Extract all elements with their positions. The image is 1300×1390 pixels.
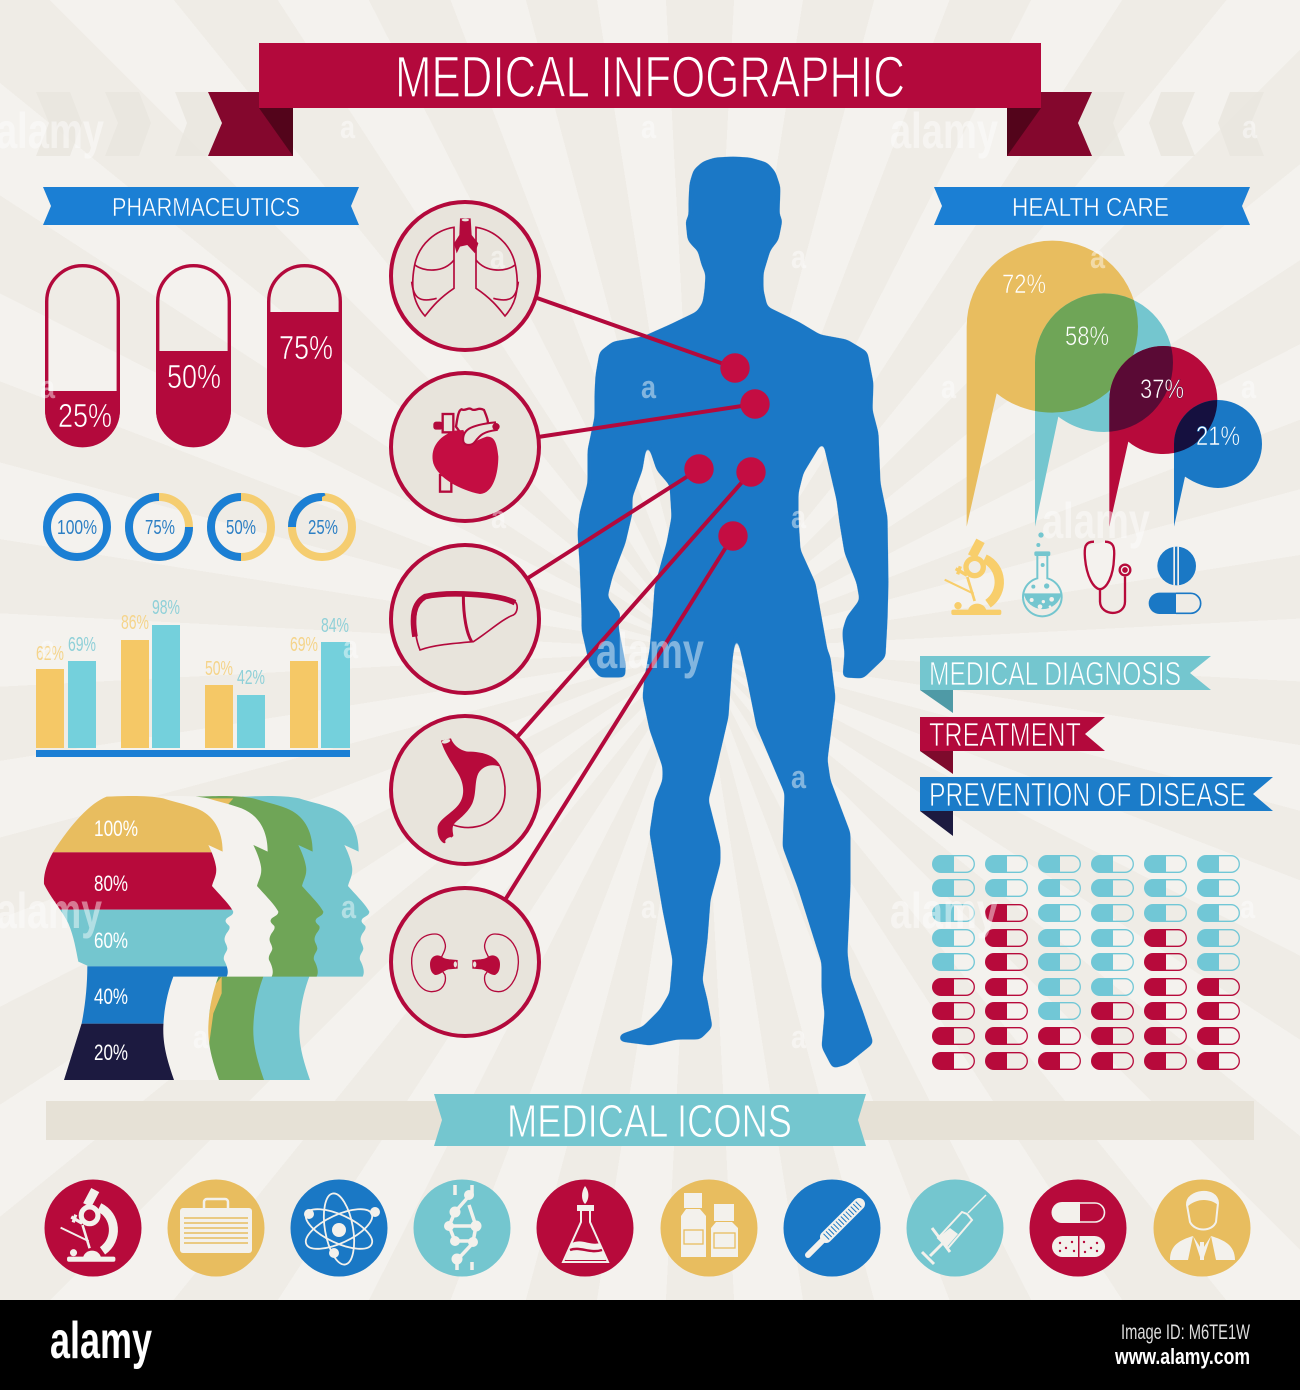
icon: dna badge [414, 1180, 510, 1276]
heading: medical icons: MEDICAL ICONS [507, 1095, 792, 1147]
head silhouettes stacked percentages: 40% [94, 984, 128, 1009]
bar chart: 84% [321, 615, 349, 637]
donut percentages [47, 497, 352, 557]
footer bar [0, 1300, 1300, 1390]
footer bar: Image ID: M6TE1W [1121, 1321, 1250, 1344]
head silhouettes stacked percentages: 100% [94, 816, 138, 841]
icon: briefcase badge [168, 1180, 264, 1276]
organ callout connector lines and dots [505, 298, 770, 900]
watermarks: a [340, 109, 355, 145]
footer bar: alamy [50, 1312, 152, 1370]
footer bar: www.alamy.com [1114, 1344, 1250, 1369]
donut percentages: 50% [226, 517, 256, 539]
background chevrons [36, 92, 1264, 156]
capsule level gauges [45, 266, 342, 447]
donut percentages: 25% [308, 517, 338, 539]
heading: pharmaceutics [43, 187, 359, 225]
organ circle: stomach [391, 716, 539, 864]
bar chart: 98% [152, 597, 180, 619]
watermarks: a [1241, 369, 1256, 405]
watermarks: a [641, 889, 656, 925]
heading: health care [934, 187, 1250, 225]
icon: doctor badge [1154, 1180, 1250, 1276]
ribbon: treatment [920, 716, 1105, 774]
watermarks: a [40, 629, 55, 665]
icon: thermometer badge [784, 1180, 880, 1276]
watermarks: a [490, 239, 505, 275]
watermarks: a [641, 369, 656, 405]
watermarks: a [343, 629, 358, 665]
ribbon: medical diagnosis: MEDICAL DIAGNOSIS [929, 655, 1181, 692]
title ribbon [208, 43, 1092, 156]
bar chart: 86% [121, 612, 149, 634]
watermarks: a [1090, 239, 1105, 275]
watermarks: a [341, 889, 356, 925]
icon: syringe badge [906, 1180, 1004, 1276]
capsule level gauges: 50% [167, 358, 221, 395]
watermarks: a [1240, 889, 1255, 925]
speech bubble chart: 72% [1002, 269, 1046, 299]
ribbon: prevention of disease [920, 776, 1273, 836]
head silhouettes stacked percentages: 80% [94, 871, 128, 896]
icon: flask badge [536, 1180, 634, 1276]
bar chart: 69% [290, 634, 318, 656]
pill grid pictogram [932, 855, 1239, 1070]
speech bubble chart: 37% [1140, 374, 1184, 404]
watermarks: alamy [0, 883, 102, 939]
speech bubble chart [967, 241, 1262, 527]
watermarks: a [791, 499, 806, 535]
icon: medicine bottles badge [660, 1180, 758, 1276]
organ circle: kidneys [391, 888, 539, 1036]
icon: yellow microscope [945, 539, 1001, 615]
watermarks: alamy [0, 103, 104, 159]
watermarks: alamy [890, 103, 998, 159]
bar chart: 50% [205, 658, 233, 680]
icon: atom badge [290, 1180, 388, 1276]
capsule level gauges: 25% [58, 397, 112, 434]
heading: pharmaceutics: PHARMACEUTICS [112, 192, 300, 222]
watermarks: a [641, 109, 656, 145]
watermarks: a [941, 369, 956, 405]
organ circle: lungs [391, 202, 539, 350]
heading: medical icons [46, 1094, 1254, 1147]
watermarks [0, 103, 1257, 1055]
bar chart [36, 597, 350, 757]
head silhouettes stacked percentages [33, 793, 369, 1081]
ribbon: medical diagnosis [920, 655, 1211, 713]
donut percentages: 75% [145, 517, 175, 539]
watermarks: a [193, 1019, 208, 1055]
organ circle: liver [391, 545, 539, 693]
watermarks: a [791, 239, 806, 275]
heading: health care: HEALTH CARE [1012, 192, 1169, 222]
watermarks: a [791, 759, 806, 795]
organ circle: heart [391, 373, 539, 521]
speech bubble chart: 21% [1196, 421, 1240, 451]
head silhouettes stacked percentages: 60% [94, 928, 128, 953]
title text: MEDICAL INFOGRAPHIC [395, 45, 905, 110]
bar chart: 69% [68, 634, 96, 656]
bar chart: 62% [36, 643, 64, 665]
bar chart: 42% [237, 667, 265, 689]
watermarks: alamy [890, 883, 998, 939]
icon: teal flask [1023, 532, 1062, 616]
icon: pills badge [1030, 1180, 1126, 1276]
human body silhouette [578, 157, 888, 1068]
icon: stethoscope [1085, 542, 1130, 613]
donut percentages: 100% [57, 517, 97, 539]
watermarks: alamy [1042, 493, 1150, 549]
watermarks: alamy [596, 623, 704, 679]
head silhouettes stacked percentages: 20% [94, 1040, 128, 1065]
capsule level gauges: 75% [279, 329, 333, 366]
watermarks: a [40, 369, 55, 405]
watermarks: a [491, 499, 506, 535]
icon: microscope badge [44, 1180, 142, 1276]
ribbon: treatment: TREATMENT [929, 716, 1081, 753]
icon: blue pills [1149, 547, 1201, 614]
watermarks: a [1242, 109, 1257, 145]
speech bubble chart: 58% [1065, 321, 1109, 351]
watermarks: a [791, 1019, 806, 1055]
